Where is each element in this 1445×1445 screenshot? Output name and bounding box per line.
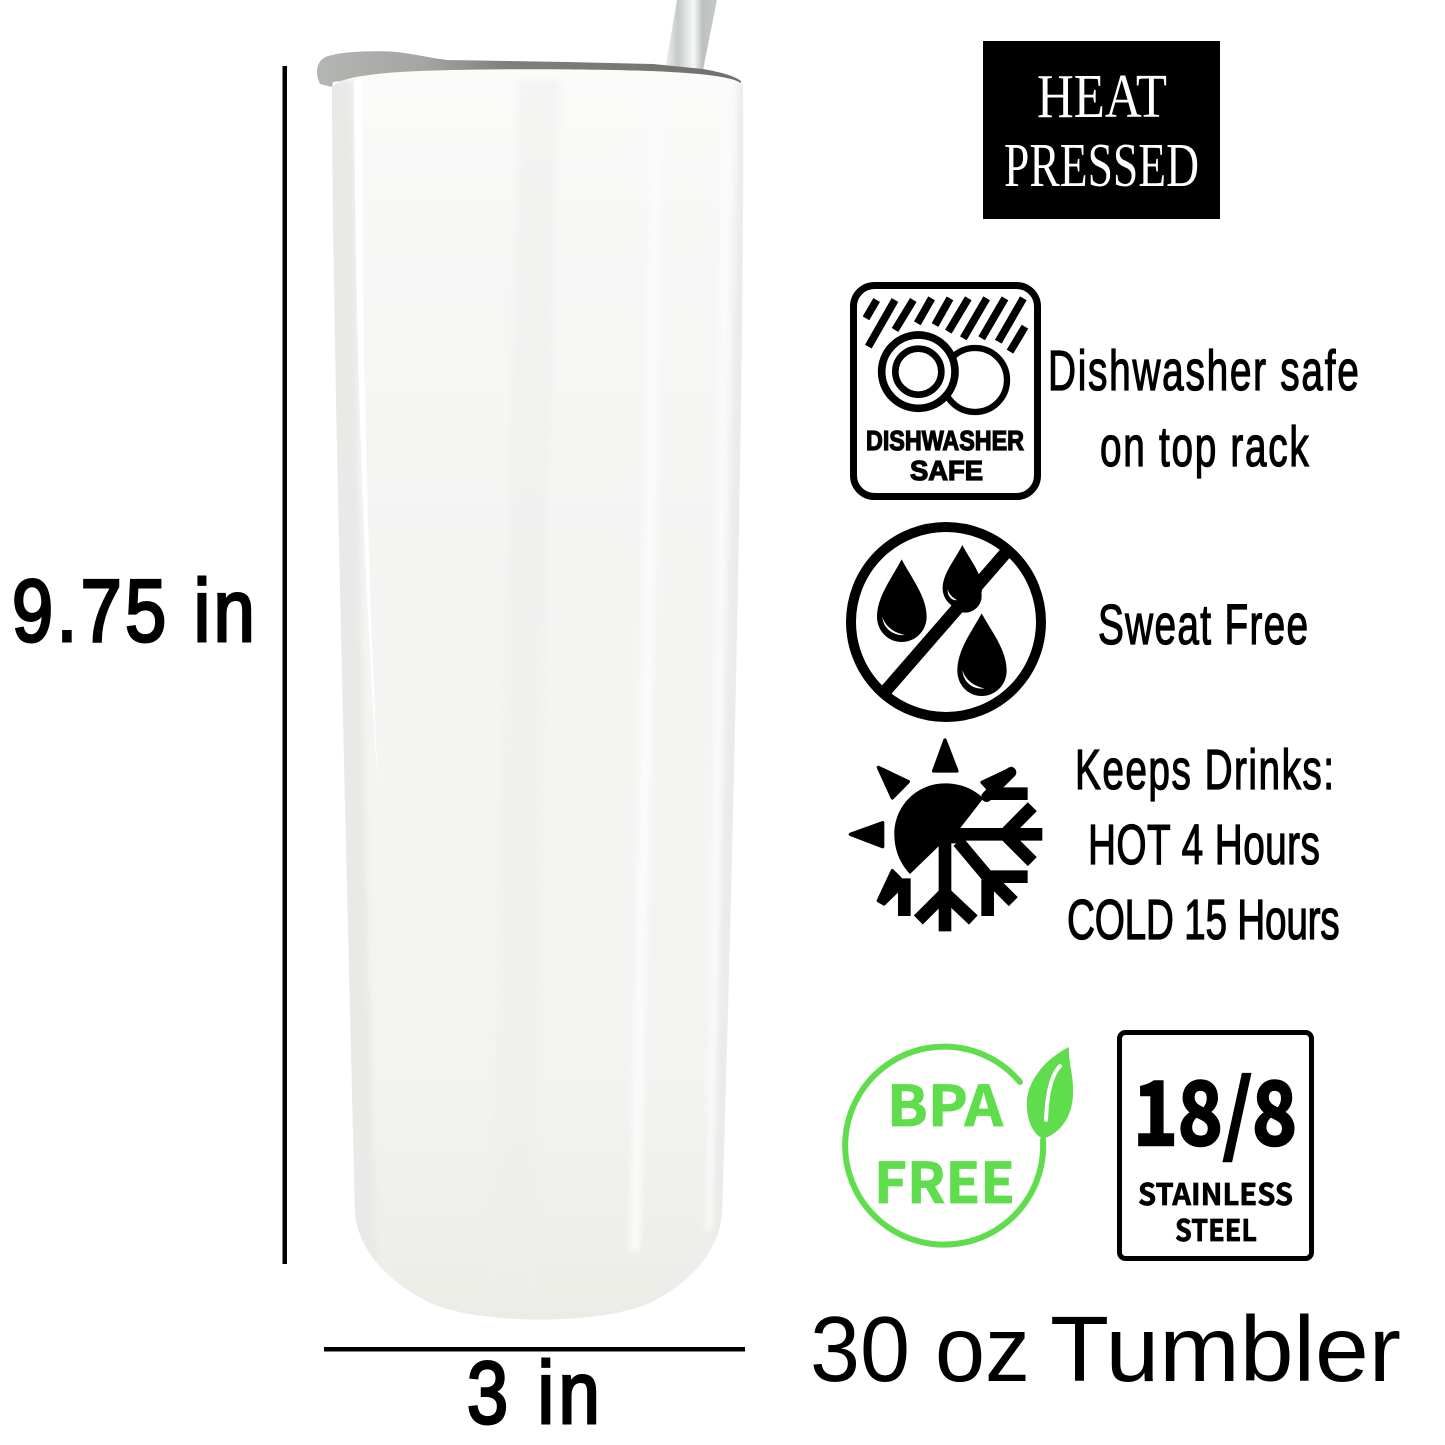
icon: dishwasher safe: DISHWASHER xyxy=(866,425,1024,456)
product title: Tumbler xyxy=(1050,1297,1401,1401)
icon: 18/8 stainless steel: STEEL xyxy=(1175,1206,1257,1250)
tumbler lid xyxy=(317,51,741,87)
product title xyxy=(810,1297,1401,1401)
icon: hot and cold xyxy=(850,740,1042,931)
icon: 18/8 stainless steel: STAINLESS xyxy=(1138,1170,1293,1214)
heat pressed badge: PRESSED xyxy=(1004,132,1199,200)
icon: bpa free xyxy=(845,1047,1073,1245)
hot and cold text: Keeps Drinks: xyxy=(1075,739,1334,802)
height dimension line xyxy=(282,66,287,1264)
icon: 18/8 stainless steel xyxy=(1120,1032,1312,1258)
tumbler body xyxy=(325,69,750,1320)
snowflake xyxy=(904,794,1042,931)
heat pressed badge: HEAT xyxy=(1037,63,1167,131)
snowflake upper arm xyxy=(987,772,1011,797)
sun rays xyxy=(850,740,1012,904)
icon: sweat free xyxy=(851,527,1041,717)
heat pressed badge xyxy=(983,41,1220,219)
icon: bpa free: BPA xyxy=(887,1062,1004,1143)
hot and cold text: COLD 15 Hours xyxy=(1067,889,1340,952)
dishwasher text xyxy=(1048,340,1359,479)
product title: 30 oz xyxy=(810,1297,1030,1401)
dishwasher text: Dishwasher safe xyxy=(1048,340,1359,403)
icon: dishwasher safe: SAFE xyxy=(910,455,983,486)
sweat free text: Sweat Free xyxy=(1098,594,1308,657)
width label: 3 in xyxy=(467,1344,600,1442)
tumbler straw xyxy=(665,0,717,70)
dishwasher text: on top rack xyxy=(1100,416,1309,479)
sun disc xyxy=(894,783,983,874)
icon: dishwasher safe xyxy=(854,286,1038,496)
icon: bpa free: FREE xyxy=(874,1139,1015,1220)
height label: 9.75 in xyxy=(12,562,255,660)
width dimension line xyxy=(324,1347,745,1352)
hot and cold text xyxy=(1067,739,1340,952)
hot and cold text: HOT 4 Hours xyxy=(1088,814,1320,877)
icon: 18/8 stainless steel: 18/8 xyxy=(1133,1044,1297,1171)
tumbler xyxy=(317,0,750,1320)
